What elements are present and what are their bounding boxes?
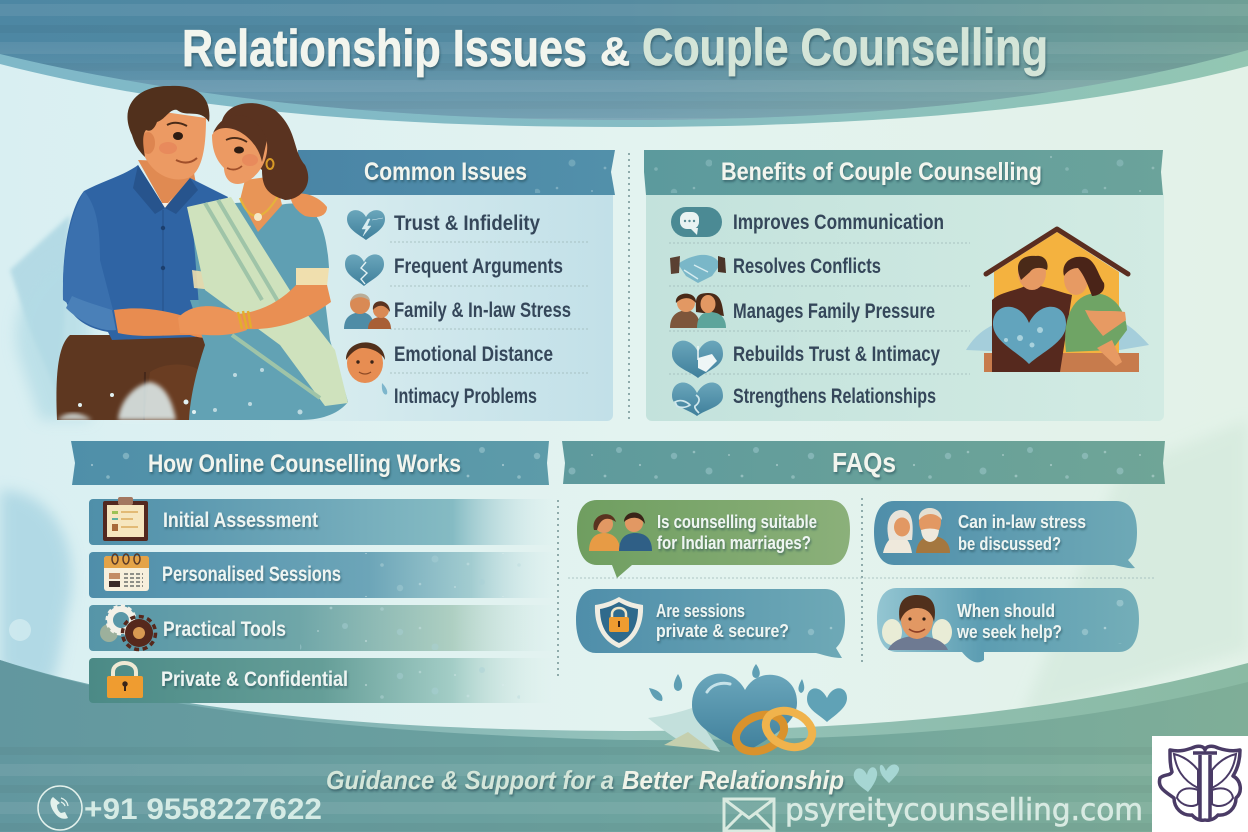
tagline: Guidance & Support for a xyxy=(326,765,614,795)
common issues list: Family & In-law Stress xyxy=(394,299,571,322)
panel: benefits of couple counselling xyxy=(644,150,1164,421)
illustration: couple xyxy=(56,86,348,420)
common issues list: Intimacy Problems xyxy=(394,385,537,408)
icon: small hearts xyxy=(854,765,899,792)
illustration: hearts and wedding rings xyxy=(648,664,847,758)
FAQ bubble: private and secure xyxy=(576,589,845,658)
FAQ bubble: Indian marriages xyxy=(577,500,850,578)
title: & xyxy=(600,30,630,74)
icon: face xyxy=(346,342,387,395)
icon: broken heart xyxy=(345,254,384,286)
icon: padlock xyxy=(107,663,143,698)
panel: how online counselling works xyxy=(71,441,555,703)
icon: phone xyxy=(38,786,82,830)
footer band xyxy=(0,660,1248,832)
how it works heading ribbon xyxy=(71,441,549,485)
FAQs heading ribbon: FAQs xyxy=(832,447,896,478)
how it works heading ribbon: How Online Counselling Works xyxy=(148,450,461,478)
step: initial assessment xyxy=(89,497,555,545)
common issues heading ribbon xyxy=(298,150,615,195)
common issues list xyxy=(390,212,589,408)
avatar: smiling man xyxy=(882,595,952,650)
avatar: couple xyxy=(589,512,652,551)
benefits list: Improves Communication xyxy=(733,211,944,234)
FAQ bubble: in-law stress: be discussed? xyxy=(958,534,1061,554)
step: private and confidential xyxy=(89,658,555,703)
icon: heart with handshake xyxy=(672,341,723,378)
FAQ bubble: when to seek help: When should xyxy=(957,601,1055,621)
icon: chat bubble xyxy=(671,207,722,237)
icon: elder and woman xyxy=(344,294,391,329)
tagline xyxy=(326,765,899,795)
icon: handshake xyxy=(670,255,726,283)
benefits list xyxy=(669,211,970,408)
icon: calendar xyxy=(104,554,149,591)
FAQ bubble: when to seek help: we seek help? xyxy=(956,622,1062,642)
title xyxy=(182,19,1048,78)
step: initial assessment: Initial Assessment xyxy=(163,509,318,532)
tagline: Better Relationship xyxy=(622,765,844,795)
common issues list: Emotional Distance xyxy=(394,343,553,366)
contact: phone xyxy=(38,786,322,830)
common issues list: Frequent Arguments xyxy=(394,255,563,278)
step: practical tools: Practical Tools xyxy=(163,618,286,641)
FAQ bubble: private and secure: private & secure? xyxy=(656,621,789,641)
benefits list: Strengthens Relationships xyxy=(733,385,936,408)
FAQ bubble: in-law stress: Can in-law stress xyxy=(958,512,1086,532)
icon: clipboard xyxy=(103,497,148,541)
contact: website: psyreitycounselling.com xyxy=(785,793,1143,828)
step: practical tools xyxy=(89,605,555,651)
FAQ bubble: private and secure: Are sessions xyxy=(656,601,745,621)
title: Couple Counselling xyxy=(642,19,1048,77)
contact: phone: +91 9558227622 xyxy=(84,793,322,826)
illustration: couple at home xyxy=(966,229,1149,372)
top header band xyxy=(0,0,1248,130)
common issues list: Trust & Infidelity xyxy=(394,212,540,235)
paint splatter at the base xyxy=(57,368,302,420)
icon: lightning heart xyxy=(347,210,385,240)
avatar: elders xyxy=(883,508,950,553)
icon: gears xyxy=(100,606,156,650)
man xyxy=(56,86,228,420)
icon: shield xyxy=(595,597,643,648)
icon: envelope xyxy=(724,799,774,831)
icon: young couple xyxy=(670,293,726,328)
logo xyxy=(1152,736,1248,832)
panel: FAQs xyxy=(562,441,1165,662)
benefits list: Manages Family Pressure xyxy=(733,300,935,323)
step: personalised sessions xyxy=(89,552,555,598)
step: personalised sessions: Personalised Sessions xyxy=(162,563,341,586)
FAQ bubble: Indian marriages: for Indian marriages? xyxy=(657,533,811,553)
FAQs heading ribbon xyxy=(562,441,1165,484)
FAQ bubble: Indian marriages: Is counselling suitable xyxy=(657,512,817,532)
benefits list: Rebuilds Trust & Intimacy xyxy=(733,343,940,366)
woman xyxy=(178,103,348,420)
FAQ bubble: when to seek help xyxy=(877,588,1139,662)
common issues heading ribbon: Common Issues xyxy=(364,158,527,186)
benefits heading ribbon xyxy=(644,150,1163,195)
divider lines xyxy=(558,153,1155,680)
panel: common issues xyxy=(250,150,615,421)
benefits list: Resolves Conflicts xyxy=(733,255,881,278)
FAQ bubble: in-law stress xyxy=(874,501,1137,568)
title: Relationship Issues xyxy=(182,20,587,78)
step: private and confidential: Private & Confidential xyxy=(161,668,348,691)
icon: mended heart xyxy=(672,382,723,416)
benefits heading ribbon: Benefits of Couple Counselling xyxy=(721,158,1042,186)
